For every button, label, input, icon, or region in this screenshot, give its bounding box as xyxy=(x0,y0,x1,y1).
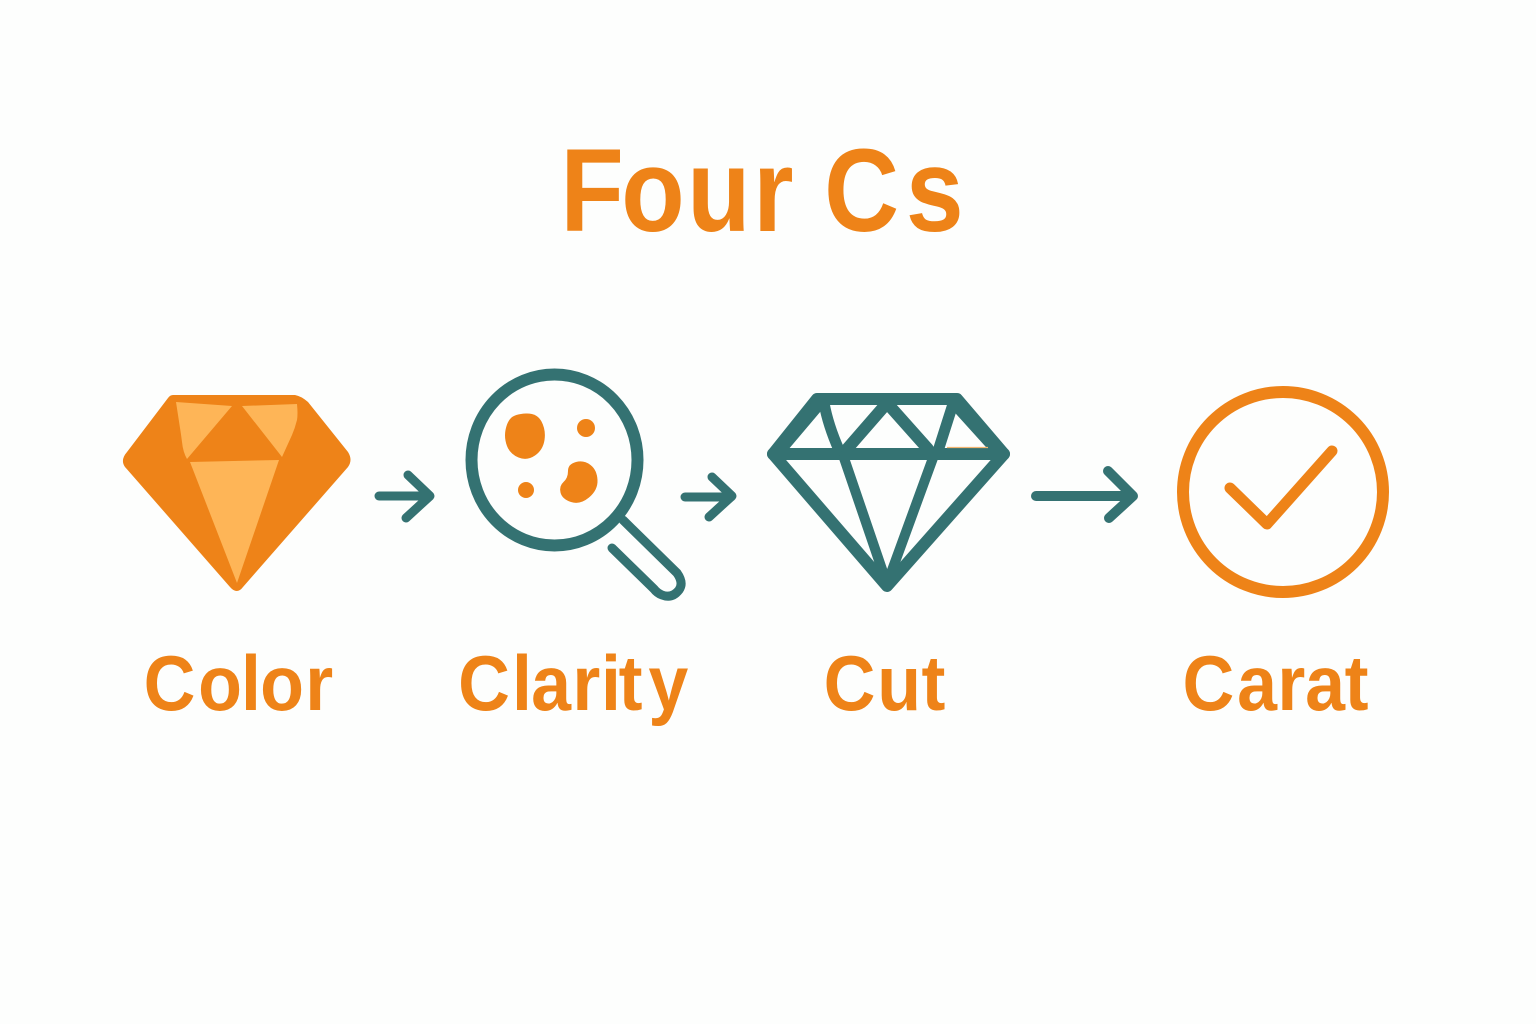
arrow: color to clarity xyxy=(379,475,430,518)
label: clarity: Clarity xyxy=(458,639,689,727)
icon: outlined diamond xyxy=(773,399,1004,586)
label: color: Color xyxy=(144,639,333,727)
icon: colored diamond xyxy=(123,395,351,591)
label: cut: Cut xyxy=(824,639,946,727)
icon: magnifying glass with inclusions xyxy=(472,374,681,596)
title: Four Cs xyxy=(560,124,964,256)
arrow: cut to carat xyxy=(1036,471,1133,518)
icon: carat check circle xyxy=(1183,392,1383,592)
label: carat: Carat xyxy=(1183,639,1369,727)
arrow: clarity to cut xyxy=(685,477,732,517)
